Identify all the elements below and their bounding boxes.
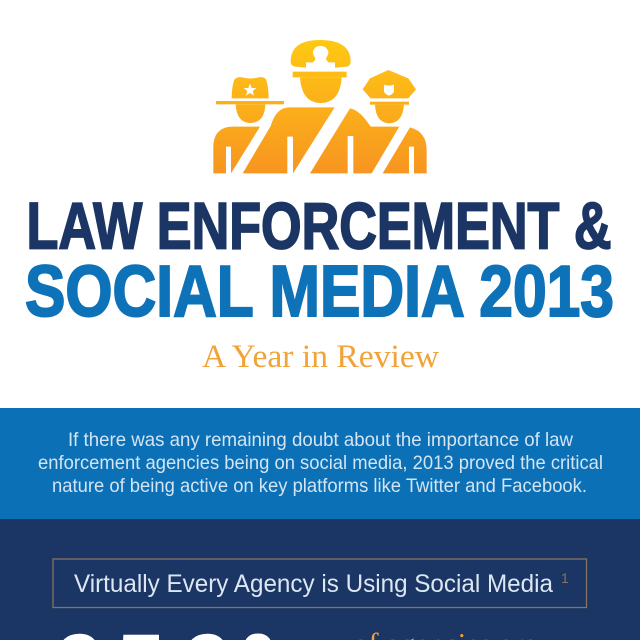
- panel: statistics section: [0, 519, 640, 640]
- section heading box: Virtually Every Agency is Using Social Media: [74, 570, 553, 598]
- icon: right officer with police cap: [363, 70, 427, 173]
- intro paragraph: [38, 429, 603, 497]
- icon: three police officers: [213, 40, 427, 173]
- intro paragraph: nature of being active on key platforms like Twitter and Facebook.: [52, 475, 587, 497]
- big statistic number: [64, 634, 270, 640]
- title: [25, 188, 614, 332]
- icon: center officer with peaked cap: [243, 40, 399, 173]
- icon: left officer with ranger hat: [213, 77, 284, 173]
- intro paragraph: enforcement agencies being on social media, 2013 proved the critical: [38, 452, 603, 474]
- intro paragraph: If there was any remaining doubt about the importance of law: [68, 429, 574, 451]
- subtitle: A Year in Review: [202, 339, 439, 375]
- section heading box: [53, 559, 586, 608]
- panel: intro band: [0, 408, 640, 519]
- section heading box: 1: [561, 570, 569, 586]
